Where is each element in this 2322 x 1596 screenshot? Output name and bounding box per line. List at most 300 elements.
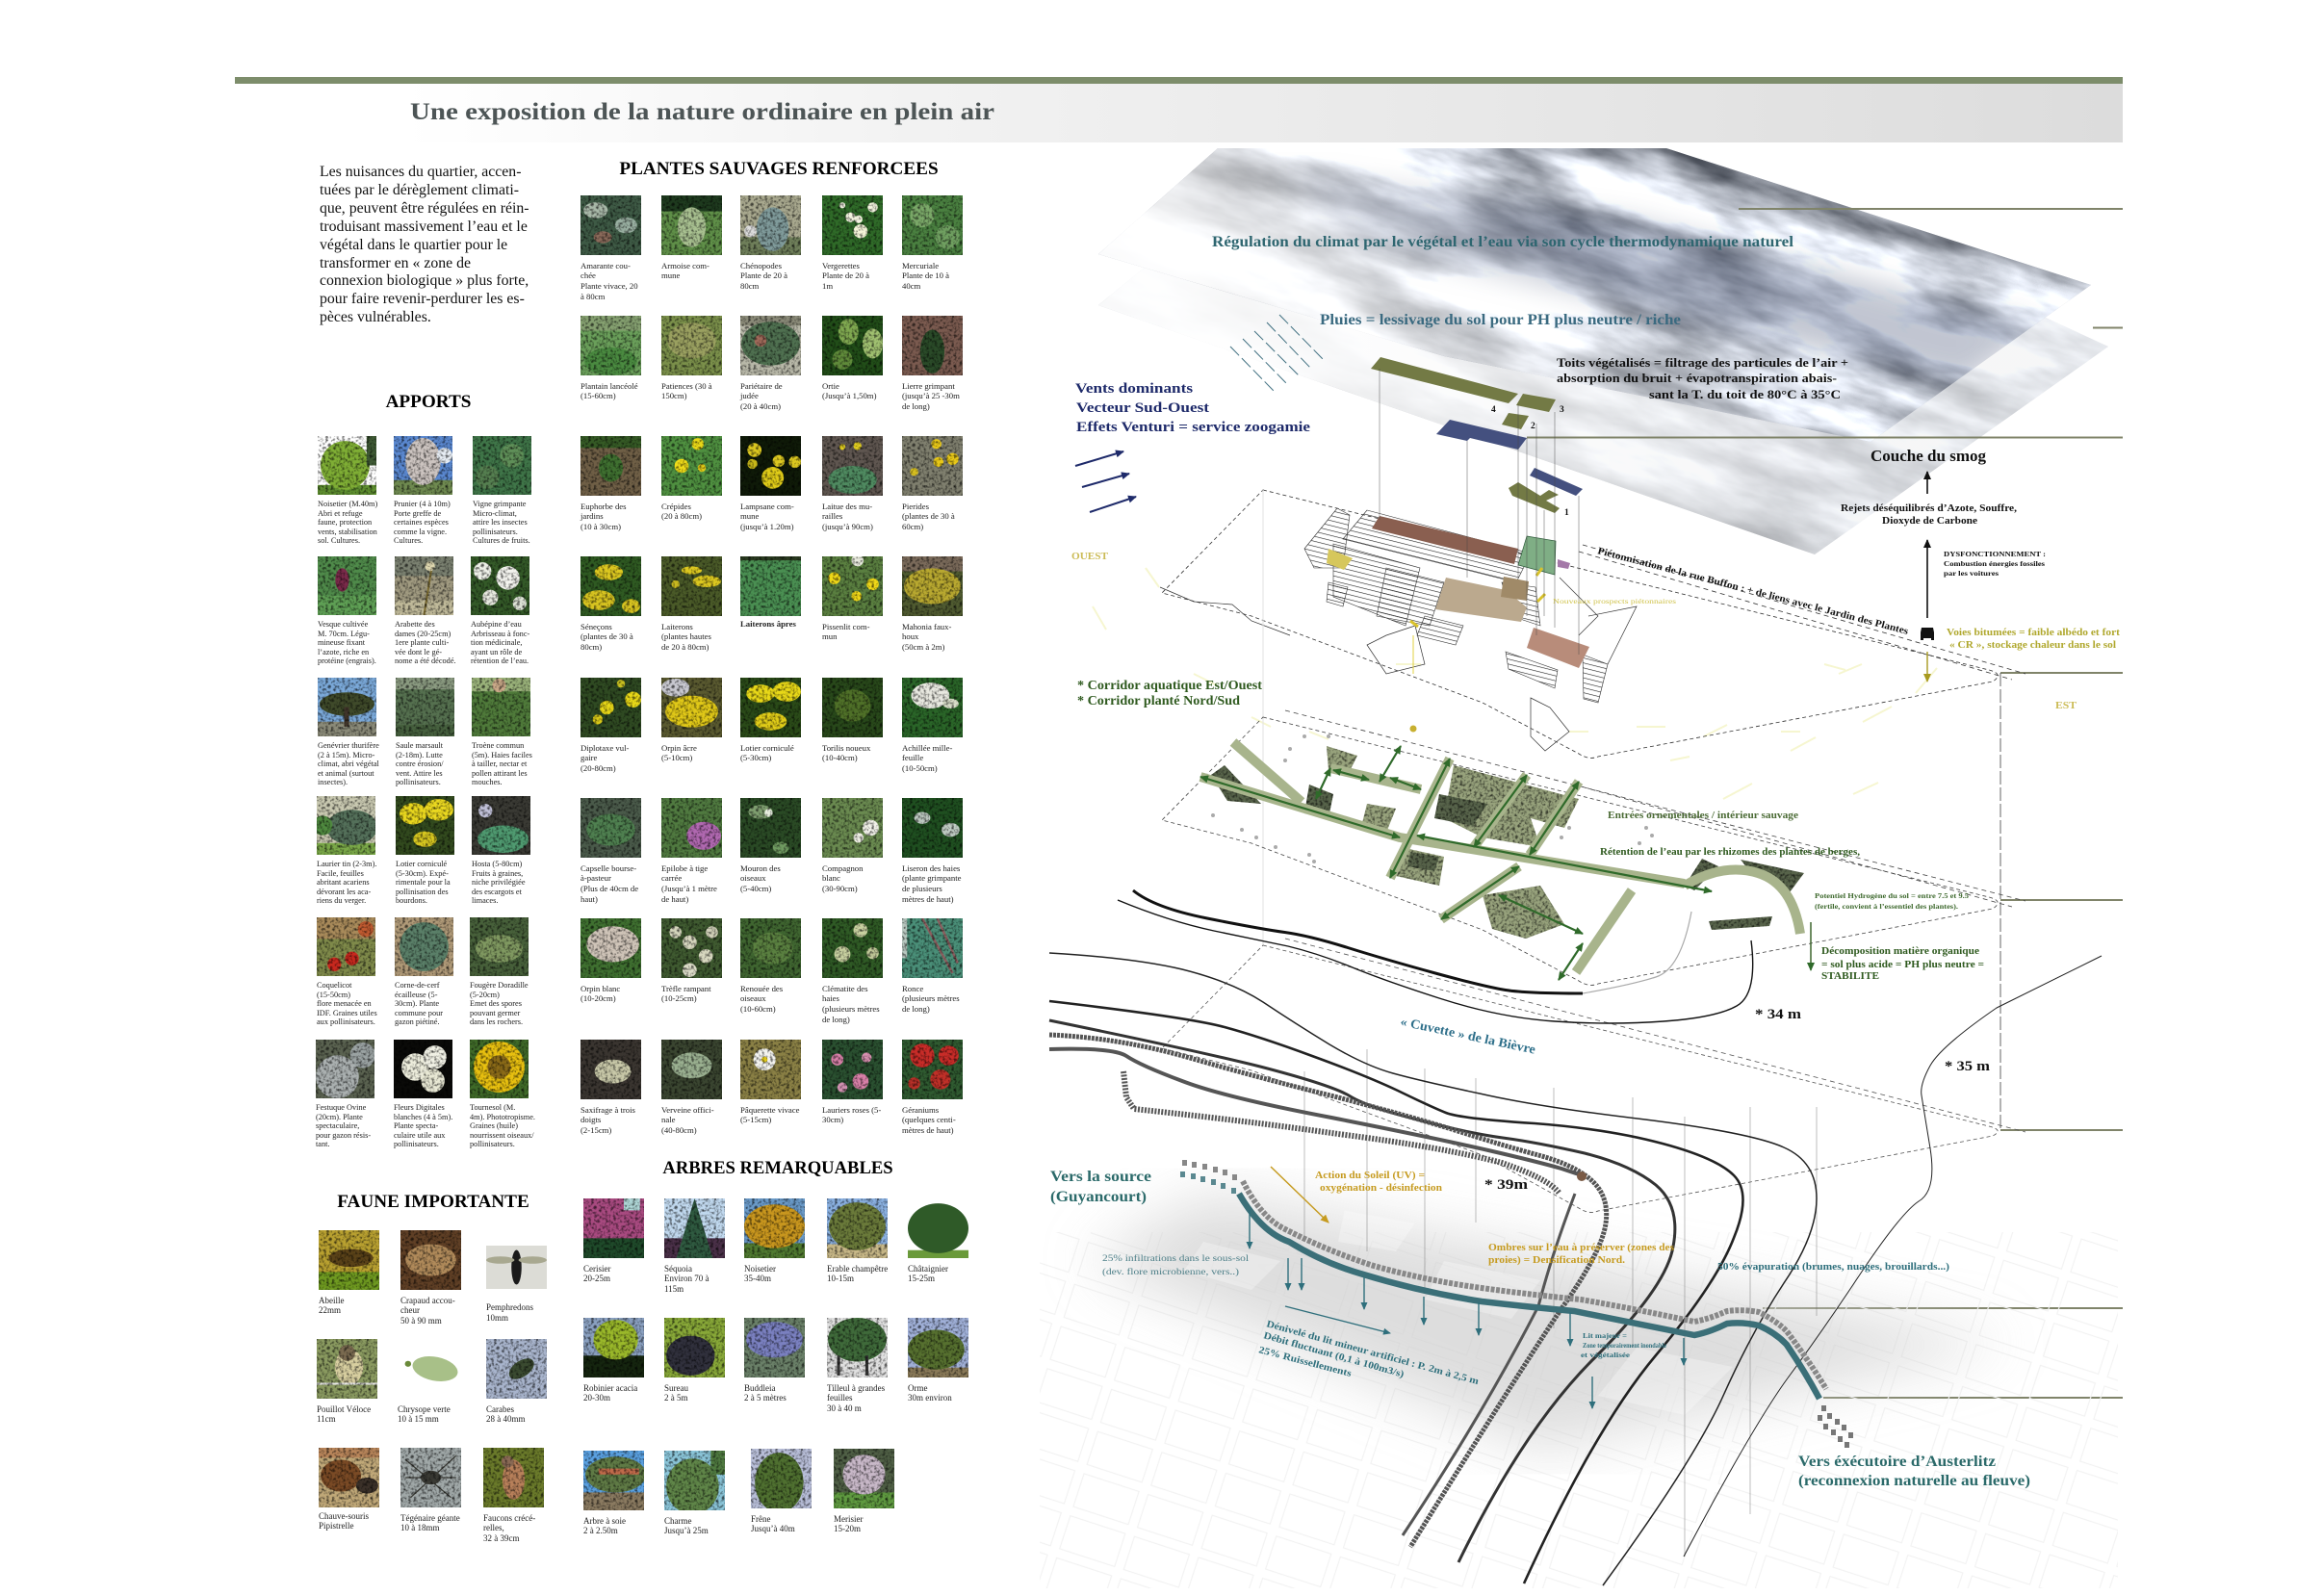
apport: lotier: Lotier corniculé xyxy=(396,860,447,868)
plant: armoise: Armoise com- xyxy=(661,261,710,270)
plant: chénopodes: Chénopodes xyxy=(740,261,782,270)
apport: fougère: Fougère Doradille xyxy=(470,981,529,990)
panel: plantes sauvages renforcées xyxy=(580,159,963,1135)
plant: séneçons: (plantes de 30 à xyxy=(580,631,633,641)
label: infiltration: 25% infiltrations dans le sous-sol xyxy=(1102,1253,1249,1264)
contour 34 m end xyxy=(1583,912,1691,993)
plant: lotier: (5-30cm) xyxy=(740,753,771,762)
fauna: crapaud xyxy=(400,1230,461,1326)
plant: renouée: oiseaux xyxy=(740,993,766,1003)
label: green roofs: absorption du bruit + évapotranspiration abais- xyxy=(1557,372,1837,385)
apport: fougère: pouvant germer xyxy=(470,1009,520,1017)
label: emissions xyxy=(1841,503,2017,527)
tree clusters xyxy=(1211,734,1654,863)
label: towards source: Vers la source xyxy=(1050,1169,1151,1185)
label: rain: Pluies = lessivage du sol pour PH plus neutre / riche xyxy=(1320,312,1681,328)
fauna: chrysope: Chrysope verte xyxy=(398,1404,451,1414)
plant: séneçons xyxy=(580,556,641,652)
plant: ortie: Ortie xyxy=(822,381,839,391)
fauna: pemphredons: Pemphredons xyxy=(486,1302,533,1312)
apport: troène: pollen attirant les xyxy=(472,769,528,778)
plant: pariétaire xyxy=(739,316,801,411)
tree: cerisier: Cerisier xyxy=(583,1264,610,1274)
road: layer 3 dashed xyxy=(1285,939,2025,1132)
plant: séneçons: 80cm) xyxy=(580,642,602,652)
intro text xyxy=(320,164,529,325)
label: corridors: * Corridor aquatique Est/Ouest xyxy=(1077,678,1263,692)
fauna: pouillot: Pouillot Véloce xyxy=(317,1404,371,1414)
label: green roofs: sant la T. du toit de 80°C à 35°C xyxy=(1649,388,1841,401)
plant: laiterons âpres xyxy=(740,556,801,629)
plant: lierre: Lierre grimpant xyxy=(902,381,955,391)
plant: trèfle xyxy=(661,918,722,1004)
tree: frêne xyxy=(751,1449,812,1534)
apport: saule: pollinisateurs. xyxy=(396,778,441,786)
title: Une exposition de la nature ordinaire en plein air xyxy=(410,97,994,125)
apport: noisetier: vents, stabilisation xyxy=(318,528,377,536)
plant: verveine xyxy=(661,1040,722,1136)
plant: crépides: Crépides xyxy=(661,502,691,511)
label: water retention: Rétention de l’eau par les rhizomes des plantes de berges, xyxy=(1600,847,1860,858)
vegetated ground patches xyxy=(1327,746,1579,939)
tree: arbre à soie xyxy=(583,1451,644,1536)
label: dominant winds: Vecteur Sud-Ouest xyxy=(1076,400,1209,416)
roof 2 xyxy=(1502,413,1529,429)
label: shade: proies) = Densification Nord. xyxy=(1488,1254,1625,1266)
block: purple xyxy=(1558,559,1570,569)
plant: liseron: mètres de haut) xyxy=(902,894,954,904)
label: riverbed and runoff: Dénivelé du lit mineur artificiel : P. 2m à 2,5 m xyxy=(1265,1319,1481,1387)
plant: diplotaxe: (20-80cm) xyxy=(580,763,616,773)
intro text: végétal dans le quartier pour le xyxy=(320,237,507,253)
apport: prunier xyxy=(394,436,452,545)
apport: genévrier xyxy=(318,678,379,786)
vertical dashed axis xyxy=(2000,673,2001,1130)
plant: verveine: nale xyxy=(661,1115,675,1124)
apport: digitales: blanches (4 à 5m). xyxy=(394,1113,452,1121)
heading: apports: APPORTS xyxy=(386,392,471,412)
tree: séquoia: 115m xyxy=(664,1284,684,1294)
heading: plantes sauvages: PLANTES SAUVAGES RENFORCEES xyxy=(619,159,939,179)
tree: merisier: 15-20m xyxy=(834,1524,861,1533)
tree: charme: Charme xyxy=(664,1516,691,1526)
road: double dashed rue Buffon xyxy=(1579,545,2025,680)
label: major bed xyxy=(1581,1331,1667,1359)
header band xyxy=(235,77,2123,142)
apport: arabette: dames (20-25cm) xyxy=(395,630,451,638)
label: organic decomposition: = sol plus acide = PH plus neutre = xyxy=(1821,959,1984,970)
tree: sureau xyxy=(664,1318,725,1403)
contour 35 m xyxy=(1684,956,2102,1557)
apport: noisetier xyxy=(318,436,377,545)
tree: séquoia: Séquoia xyxy=(664,1264,692,1274)
plant: géraniums: (quelques centi- xyxy=(902,1115,956,1124)
plant: ortie: (Jusqu’à 1,50m) xyxy=(822,391,876,400)
roof numbers xyxy=(1491,405,1569,518)
plant: renouée xyxy=(740,918,801,1015)
block: tan 2 xyxy=(1501,577,1529,601)
label: major bed: Zone temporairement inondable xyxy=(1583,1341,1667,1350)
apport: hosta: limaces. xyxy=(472,896,498,905)
plant: laitue: railles xyxy=(822,511,842,521)
plant: clématite: Clématite des xyxy=(822,984,868,993)
apport: genévrier: et animal (surtout xyxy=(318,769,374,778)
apport: corne de cerf: gazon piétiné. xyxy=(395,1017,440,1026)
label: major bed: et végétalisée xyxy=(1581,1351,1631,1359)
road: layer 2 double dashed xyxy=(1285,710,2025,907)
apport: vigne: Vigne grimpante xyxy=(473,500,526,508)
plant: amarante: Amarante cou- xyxy=(580,261,631,270)
roof: navy xyxy=(1436,420,1527,450)
tree: buddleia xyxy=(744,1318,805,1403)
label: infiltration xyxy=(1102,1253,1249,1277)
plant: orpin blanc: (10-20cm) xyxy=(580,993,616,1003)
plant: euphorbe: jardins xyxy=(580,511,604,521)
plant: torilis: (10-40cm) xyxy=(822,753,858,762)
block: tan xyxy=(1435,578,1527,622)
fauna: faucons xyxy=(483,1448,544,1544)
plant: mahonia: Mahonia faux- xyxy=(902,622,951,631)
intro text: que, peuvent être régulées en réin- xyxy=(320,200,529,217)
label: 35 m: * 35 m xyxy=(1945,1059,1991,1074)
plant: laiterons âpres: Laiterons âpres xyxy=(740,619,796,629)
apport: tournesol: Tournesol (M. xyxy=(470,1103,515,1112)
dark planted blocks xyxy=(1211,765,1804,930)
apport: digitales: pollinisateurs. xyxy=(394,1140,439,1148)
label: green roofs: Toits végétalisés = filtrage des particules de l’air + xyxy=(1557,356,1848,370)
apport: coquelicot: Coquelicot xyxy=(317,981,351,990)
apport: arabette: Arabette des xyxy=(395,620,435,629)
label: 34 m: * 34 m xyxy=(1755,1007,1802,1022)
label: corridors: * Corridor planté Nord/Sud xyxy=(1077,693,1241,708)
plant: amarante xyxy=(580,195,641,301)
plant: ortie xyxy=(822,316,883,400)
contour 37 m xyxy=(1049,1001,1742,1583)
label: ornamental entrances: Entrées ornementales / intérieur sauvage xyxy=(1608,811,1798,821)
apport: prunier: comme la vigne. xyxy=(394,528,447,536)
plant: clématite xyxy=(822,918,883,1024)
label: dysfunction: par les voitures xyxy=(1944,569,1999,578)
label: emissions: Dioxyde de Carbone xyxy=(1882,516,1977,527)
plant: lauriers roses: Lauriers roses (5- xyxy=(822,1105,881,1115)
plant: liseron: Liseron des haies xyxy=(902,863,960,873)
plant: liseron: de plusieurs xyxy=(902,884,942,893)
plant: lampsane: mune xyxy=(740,511,759,521)
apport: aubépine: ayant un rôle de xyxy=(471,648,522,656)
apport: laurier tin: Facile, feuilles xyxy=(317,869,364,878)
plant: diplotaxe: gaire xyxy=(580,753,597,762)
apport: lotier xyxy=(396,796,454,905)
label: asphalt: Voies bitumées = faible albédo et fort xyxy=(1947,628,2121,638)
plant: compagnon: (30-90cm) xyxy=(822,884,858,893)
tree: châtaignier: Châtaignier xyxy=(908,1264,948,1274)
plant: patiences: 150cm) xyxy=(661,391,687,400)
plant: saxifrage: Saxifrage à trois xyxy=(580,1105,635,1115)
plant: mercuriale: 40cm xyxy=(902,281,920,291)
plant: diplotaxe: Diplotaxe vul- xyxy=(580,743,629,753)
layer 1: building wireframes xyxy=(1304,508,1608,703)
plant: capselle: (Plus de 40cm de xyxy=(580,884,638,893)
contour 36 m xyxy=(1049,953,1817,1585)
panel: apports xyxy=(316,392,535,1148)
plant: orpin blanc xyxy=(580,918,641,1004)
contour 40 m lower xyxy=(1403,1194,1575,1535)
plant: compagnon: blanc xyxy=(822,873,840,883)
arrow: sunlight xyxy=(1271,1167,1329,1223)
label: dysfunction: DYSFONCTIONNEMENT : xyxy=(1944,550,2046,558)
plant: saxifrage: (2-15cm) xyxy=(580,1125,611,1135)
apport: tournesol xyxy=(470,1040,535,1148)
terrain contour lines xyxy=(1049,890,2102,1585)
tree: noisetier: 35-40m xyxy=(744,1274,771,1283)
apport: lotier: (5-30cm). Expé- xyxy=(396,869,449,878)
block: yellow xyxy=(1327,549,1353,570)
apport: saule: vent. Attire les xyxy=(396,769,443,778)
apport: saule: Saule marsault xyxy=(396,741,443,750)
apport: lotier: pollinisation des xyxy=(396,888,449,896)
apport: vesque: M. 70cm. Légu- xyxy=(318,630,370,638)
apport: festuque: pour gazon résis- xyxy=(316,1131,371,1140)
vertical lines to river xyxy=(1304,1049,1817,1557)
intro text: connexion biologique » plus forte, xyxy=(320,272,529,289)
apport: genévrier: Genévrier thurifère xyxy=(318,741,379,750)
apport: laurier tin: riens du verger. xyxy=(317,896,366,905)
apport: troène: (5m). Haies faciles xyxy=(472,751,532,759)
apport: troène xyxy=(472,678,532,786)
block: brown xyxy=(1372,516,1518,564)
plant: liseron: (plante grimpante xyxy=(902,873,962,883)
panel: arbres remarquables xyxy=(578,1155,972,1559)
apport: fougère: (5-20cm) xyxy=(470,991,500,999)
plant: orpin âcre: Orpin âcre xyxy=(661,743,697,753)
plant: pissenlit: Pissenlit com- xyxy=(822,622,869,631)
fauna: carabes xyxy=(486,1339,547,1425)
label: hydrogen potential: Potentiel Hydrogène du sol = entre 7.5 et 9.5 xyxy=(1815,891,1969,900)
tree: séquoia xyxy=(664,1198,725,1295)
plant: pariétaire: judée xyxy=(740,391,759,400)
plant: plantain: Plantain lancéolé xyxy=(580,381,638,391)
apport: troène: Troène commun xyxy=(472,741,524,750)
fauna: tégénaire xyxy=(400,1448,461,1533)
apport: digitales: culaire utile aux xyxy=(394,1131,445,1140)
plant: mouron: (5-40cm) xyxy=(740,884,771,893)
label: corridors xyxy=(1077,678,1263,708)
fauna: crapaud: 50 à 90 mm xyxy=(400,1316,442,1326)
plant: pierides: Pierides xyxy=(902,502,929,511)
label: infiltration: (dev. flore microbienne, vers..) xyxy=(1102,1267,1239,1277)
plant: épilobe: de haut) xyxy=(661,894,688,904)
tree: robinier: 20-30m xyxy=(583,1393,610,1403)
tree: tilleul: Tilleul à grandes xyxy=(827,1383,885,1393)
fauna: pemphredons xyxy=(486,1246,547,1323)
plant: laiterons: de 20 à 80cm) xyxy=(661,642,709,652)
apport: festuque: Festuque Ovine xyxy=(316,1103,366,1112)
river outlet squares xyxy=(1818,1405,1853,1448)
intro text: Les nuisances du quartier, accen- xyxy=(320,164,521,180)
roof: navy small xyxy=(1530,468,1583,496)
tree: charme: Jusqu’à 25m xyxy=(664,1526,709,1535)
label: towards source: (Guyancourt) xyxy=(1050,1189,1147,1205)
apport: digitales xyxy=(394,1040,452,1148)
label: organic decomposition xyxy=(1821,945,1984,982)
plant: crépides: (20 à 80cm) xyxy=(661,511,702,521)
plant: laitue xyxy=(822,436,883,531)
label: riverbed and runoff: 25% Ruissellements xyxy=(1257,1345,1353,1379)
plant: vergerettes: 1m xyxy=(822,281,833,291)
apport: vigne: pollinisateurs. xyxy=(473,528,518,536)
plant: pierides xyxy=(902,436,963,531)
label: dysfunction: Combustion énergies fossiles xyxy=(1944,559,2045,568)
vertical projection lines xyxy=(1380,369,1579,655)
apport: coquelicot: flore menacée en xyxy=(317,999,372,1008)
tree: érable: 10-15m xyxy=(827,1274,854,1283)
plant: orpin âcre xyxy=(661,678,722,763)
light green paths xyxy=(1200,742,1800,972)
arrow: heat into soil xyxy=(1926,652,1928,682)
apport: tournesol: 4m). Phototropisme. xyxy=(470,1113,535,1121)
plant: laiterons: Laiterons xyxy=(661,622,693,631)
plant: achillée xyxy=(902,678,963,774)
label: shade: Ombres sur l’eau à préserver (zones des xyxy=(1488,1242,1674,1253)
apport: prunier: Prunier (4 à 10m) xyxy=(394,500,451,508)
fauna: abeille: Abeille xyxy=(319,1296,345,1305)
plant: amarante: à 80cm xyxy=(580,292,605,301)
label: dominant winds xyxy=(1075,381,1310,435)
apport: festuque: tant. xyxy=(316,1140,330,1148)
apport: genévrier: (2 à 15m). Micro- xyxy=(318,751,374,759)
apport: prunier: Cultures. xyxy=(394,536,423,545)
apport: vesque xyxy=(318,556,376,665)
plant: pâquerette xyxy=(740,1040,801,1125)
plant: lauriers roses: 30cm) xyxy=(822,1115,843,1124)
label: Bièvre basin: « Cuvette » de la Bièvre xyxy=(1399,1014,1536,1057)
tree: frêne: Jusqu’à 40m xyxy=(751,1524,795,1533)
plant: laiterons: (plantes hautes xyxy=(661,631,711,641)
plant: achillée: feuille xyxy=(902,753,923,762)
fauna: faucons: relles, xyxy=(483,1523,504,1532)
plant: pissenlit: mun xyxy=(822,631,837,641)
apport: festuque xyxy=(316,1040,374,1148)
layer 2: dashed outline xyxy=(1162,717,1998,985)
plant: mouron: Mouron des xyxy=(740,863,781,873)
apport: corne de cerf: commune pour xyxy=(395,1009,443,1017)
tree: érable xyxy=(827,1198,888,1284)
label: riverbed and runoff: Débit fluctuant (0,1 à 100m3/s) xyxy=(1262,1330,1406,1380)
faint wind dashes xyxy=(1093,568,1937,799)
apport: laurier tin: dévorant les aca- xyxy=(317,888,371,896)
plant: euphorbe: (10 à 30cm) xyxy=(580,522,621,531)
apport: laurier tin xyxy=(317,796,376,905)
intro text: transformer en « zone de xyxy=(320,255,471,271)
apport: digitales: Plante specta- xyxy=(394,1121,438,1130)
apport: festuque: spectaculaire, xyxy=(316,1121,359,1130)
contour 34 m thin xyxy=(1118,900,1753,1023)
apport: noisetier: sol. Cultures. xyxy=(318,536,360,545)
icon: pedestrian arrows xyxy=(1410,568,1545,627)
apport: aubépine xyxy=(471,556,529,665)
fauna: crapaud: Crapaud accou- xyxy=(400,1296,455,1305)
label: rue Buffon pedestrianisation: Piétonnisation de la rue Buffon : + de liens avec le Jardin des Plantes xyxy=(1596,546,1909,637)
plant: capselle xyxy=(580,798,641,904)
fauna: faucons: Faucons crécé- xyxy=(483,1513,535,1523)
layer: lower cloud plane xyxy=(1098,279,2108,554)
green corridor arrows xyxy=(1200,746,1712,980)
apport: troène: mouches. xyxy=(472,778,503,786)
apport: vigne xyxy=(473,436,531,545)
fauna: faucons: 32 à 39cm xyxy=(483,1533,520,1543)
plant: mahonia xyxy=(902,556,963,653)
plant: ronce: (plusieurs mètres xyxy=(902,993,960,1003)
apport: vigne: Cultures de fruits. xyxy=(473,536,530,545)
plant: vergerettes: Plante de 20 à xyxy=(822,270,869,280)
label: evaporation: 50% évapuration (brumes, nuages, brouillards...) xyxy=(1717,1262,1950,1273)
plant: lierre xyxy=(902,316,963,411)
label: sunlight xyxy=(1315,1170,1442,1194)
apport: lotier: rimentale pour la xyxy=(396,878,451,887)
river: Bièvre grey bank xyxy=(1243,1181,1826,1389)
plant: renouée: Renouée des xyxy=(740,984,783,993)
plant: capselle: à-pasteur xyxy=(580,873,611,883)
plant: plantain xyxy=(580,316,641,400)
apport: aubépine: rétention de l’eau. xyxy=(471,656,529,665)
apport: corne de cerf: 30cm). Plante xyxy=(395,999,439,1008)
label: towards Austerlitz: Vers éxécutoire d’Austerlitz xyxy=(1798,1454,1996,1470)
plant: compagnon: Compagnon xyxy=(822,863,863,873)
plant: pariétaire: (20 à 40cm) xyxy=(740,401,781,411)
plant: patiences: Patiences (30 à xyxy=(661,381,712,391)
plant: lierre: (jusqu’à 25 -30m xyxy=(902,391,960,400)
plant: euphorbe: Euphorbe des xyxy=(580,502,627,511)
apport: laurier tin: Laurier tin (2-3m). xyxy=(317,860,376,868)
plant: lampsane: Lampsane com- xyxy=(740,502,794,511)
apport: corne de cerf xyxy=(395,917,453,1026)
plant: épilobe xyxy=(661,798,722,904)
plant: épilobe: Epilobe à tige xyxy=(661,863,708,873)
label: 39 m: * 39m xyxy=(1484,1177,1529,1193)
apport: vesque: protéine (engrais). xyxy=(318,656,376,665)
plant: orpin âcre: (5-10cm) xyxy=(661,753,692,762)
apport: lotier: bourdons. xyxy=(396,896,427,905)
fauna: carabes: Carabes xyxy=(486,1404,514,1414)
plant: trèfle: (10-25cm) xyxy=(661,993,697,1003)
plant: clématite: (plusieurs mètres xyxy=(822,1004,880,1014)
fauna: chauve-souris: Chauve-souris xyxy=(319,1511,369,1521)
fauna: pouillot xyxy=(317,1339,377,1425)
plant: mahonia: houx xyxy=(902,631,918,641)
tree: robinier xyxy=(583,1318,644,1403)
plant: épilobe: carrée xyxy=(661,873,682,883)
fauna: chauve-souris: Pipistrelle xyxy=(319,1521,354,1531)
intro text: tuées par le dérèglement climati- xyxy=(320,182,519,198)
label: asphalt: « CR », stockage chaleur dans le sol xyxy=(1949,640,2116,651)
layer: upper cloud plane xyxy=(1098,148,2091,442)
tree: noisetier xyxy=(744,1198,805,1284)
apport: arabette xyxy=(395,556,456,665)
apport: troène: à tailler, nectar et xyxy=(472,759,527,768)
plant: laiterons xyxy=(661,556,722,652)
label: ouest: OUEST xyxy=(1071,552,1108,562)
plant: mercuriale: Mercuriale xyxy=(902,261,939,270)
apport: arabette: nome a été décodé. xyxy=(395,656,456,665)
apport: corne de cerf: écailleuse (5- xyxy=(395,991,437,999)
tree: charme xyxy=(664,1451,725,1536)
plant: mahonia: (50cm à 2m) xyxy=(902,642,944,652)
plant: pissenlit xyxy=(822,556,883,641)
plant: laitue: (jusqu’à 90cm) xyxy=(822,522,873,531)
roof numbers: 4 xyxy=(1491,405,1496,415)
contour 39 m hatched xyxy=(1049,1035,1607,1547)
apport: digitales: Fleurs Digitales xyxy=(394,1103,445,1112)
